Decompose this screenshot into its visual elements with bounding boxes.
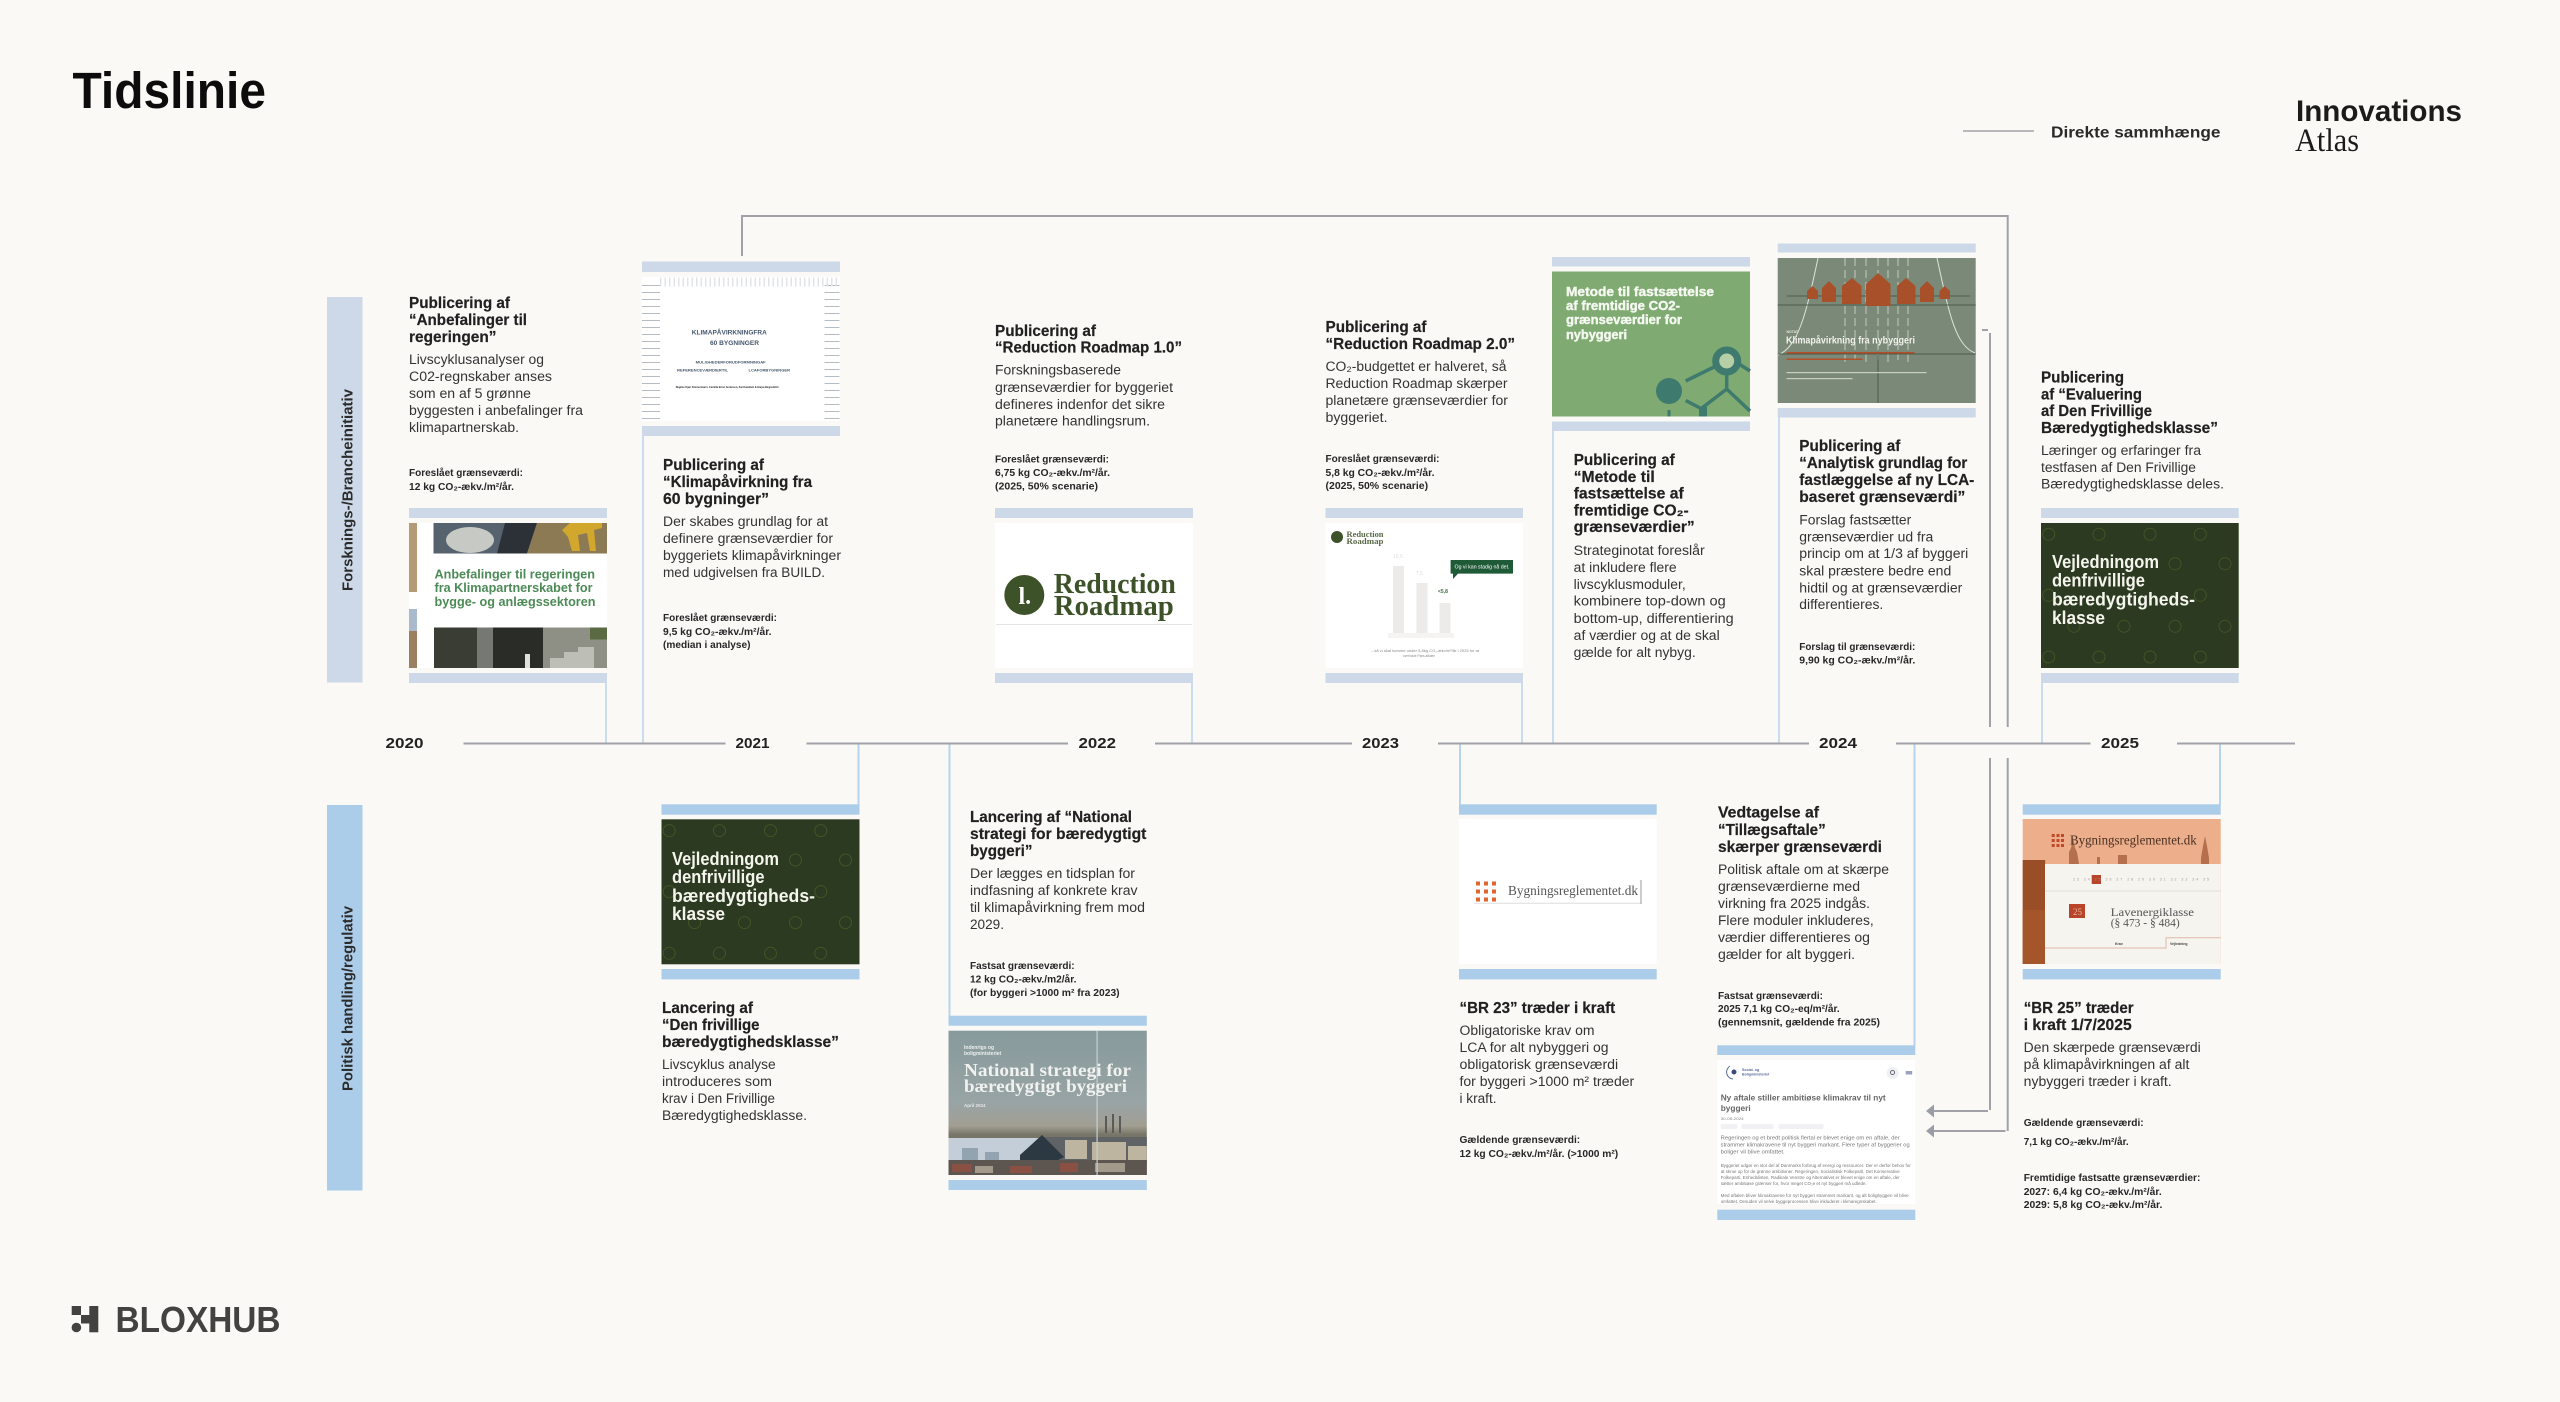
heading — [2024, 1000, 2134, 1034]
heading: “Reduction Roadmap 1.0” — [995, 340, 1182, 356]
bottom bar — [1717, 1210, 1915, 1220]
bottom bar — [1326, 673, 1523, 683]
body text: for byggeri >1000 m² træder — [1460, 1074, 1635, 1089]
side label: Politisk handling/regulativ — [327, 805, 362, 1190]
bottom bar — [1552, 422, 1750, 431]
cover image: Metode — [1552, 272, 1750, 416]
body text: til klimapåvirkning frem mod — [970, 900, 1145, 915]
cover image: Reduction Roadmap chart — [1326, 523, 1523, 668]
body text: Der skabes grundlag for at — [663, 514, 828, 529]
logo: Innovations Atlas — [2295, 95, 2462, 159]
cover image: National strategi: National strategi for — [964, 1060, 1131, 1080]
body text: livscyklusmoduler, — [1574, 577, 1686, 592]
body text: på klimapåvirkningen af alt — [2024, 1057, 2190, 1072]
body text: grænseværdier for byggeriet — [995, 380, 1173, 395]
timeline axis: 2024 — [1819, 735, 1858, 752]
cover image: Metode: Metode til fastsættelse — [1566, 285, 1714, 299]
current limit value: Gældende grænseværdi: — [1460, 1134, 1580, 1146]
cover image: Vejledning om den frivillige bæredygtighedsklasse — [2041, 523, 2239, 668]
body text — [663, 514, 842, 580]
cover image: ministry web page: 30-05-2024 — [1721, 1117, 1744, 1121]
heading: Publicering — [2041, 370, 2124, 387]
current limit value — [1460, 1134, 1618, 1160]
body text: Obligatoriske krav om — [1460, 1023, 1594, 1038]
body text: definere grænseværdier for — [663, 531, 834, 546]
body text: i kraft. — [1460, 1091, 1496, 1106]
body text — [409, 352, 584, 435]
heading: skærper grænseværdi — [1718, 839, 1882, 856]
timeline axis: 2022 — [1078, 735, 1116, 752]
cover image: National strategi: Indenrigs og — [964, 1045, 994, 1051]
cover image: Klimapåvirkning fra nybyggeri — [1778, 258, 1976, 403]
body text — [2024, 1040, 2201, 1089]
proposed limit value: Foreslået grænseværdi: — [409, 467, 523, 479]
arrow: direct link from Klimapåvirkning 60 bygninger to Tillægsaftale — [742, 216, 2008, 1138]
body text: defineres indenfor det sikre — [995, 397, 1165, 412]
cover image: Metode: nybyggeri — [1566, 328, 1627, 342]
body text: værdier differentieres og — [1718, 930, 1870, 945]
body text: med udgivelsen fra BUILD. — [663, 565, 825, 580]
cover image: Bygningsreglementet site: Lavenergiklasse — [2111, 905, 2194, 919]
proposed limit value — [1799, 641, 1915, 666]
cover image: Klimapåvirkning: REFERENCEVÆRDIERTIL — [677, 368, 729, 372]
body text: differentieres. — [1799, 597, 1883, 612]
cover image: ministry web page: at skrue op for de grønne ambitioner. Regeringen, Socialistisk Folkeparti, Det Konservative — [1721, 1169, 1900, 1174]
proposed limit value — [1326, 453, 1440, 492]
cover image: National strategi: April 2024 — [964, 1103, 986, 1108]
cover image: Bygningsreglementet site — [2023, 819, 2221, 964]
heading: i kraft 1/7/2025 — [2024, 1017, 2132, 1034]
cover image: Reduction Roadmap chart: <5,8 — [1438, 589, 1448, 595]
future limit values: 2027: 6,4 kg CO₂-ækv./m²/år. — [2024, 1186, 2162, 1198]
timeline axis: 2020 — [386, 735, 424, 752]
body text: Bæredygtighedsklasse deles. — [2041, 477, 2224, 492]
heading: Publicering af — [663, 457, 765, 474]
cover image: Reduction Roadmap chart: 10,5 — [1393, 554, 1403, 560]
timeline axis: 2025 — [2101, 735, 2139, 752]
body text: C02-regnskaber anses — [409, 369, 552, 384]
cover image: Anbefalinger: fra Klimapartnerskabet for — [434, 580, 592, 595]
fixed limit value: 2025 7,1 kg CO₂-eq/m²/år. — [1718, 1003, 1840, 1015]
cover image: Reduction Roadmap chart: overholde Paris-aftalen — [1403, 654, 1435, 658]
heading: byggeri” — [970, 843, 1032, 860]
cover image: Klimapåvirkning — [642, 277, 840, 421]
proposed limit value: 12 kg CO₂-ækv./m²/år. — [409, 481, 514, 493]
heading: “Tillægsaftale” — [1718, 822, 1826, 839]
cover image: Vejledning om den frivillige bæredygtighedsklasse — [662, 819, 860, 964]
body text: byggeriet. — [1326, 410, 1388, 425]
logo: BLOXHUB: BLOXHUB — [116, 1299, 280, 1340]
panel: 2020 Anbefalinger til regeringen — [409, 295, 607, 683]
cover image: Vejledning om den frivillige bæredygtighedsklasse: Vejledningom — [672, 849, 779, 869]
fixed limit value — [1718, 990, 1880, 1029]
cover image: Vejledning om den frivillige bæredygtighedsklasse: denfrivillige — [672, 867, 764, 887]
body text — [1326, 359, 1509, 425]
panel: 2022 National strategi for bæredygtigt byggeri — [948, 809, 1147, 1190]
heading: “BR 25” træder — [2024, 1000, 2134, 1017]
proposed limit value: (2025, 50% scenarie) — [1326, 480, 1428, 492]
cover image: Klimapåvirkning: 60 BYGNINGER — [710, 340, 759, 347]
heading: “Klimapåvirkning fra — [663, 473, 812, 491]
current limit value: Gældende grænseværdi: — [2024, 1117, 2144, 1129]
body text: Forskningsbaserede — [995, 362, 1121, 378]
cover image: Bygningsreglementet site: (§ 473 - § 484) — [2111, 916, 2180, 930]
cover image: Bygningsreglementet site: 25 — [2073, 907, 2082, 917]
cover image: ministry web page: Regeringen og et bredt politisk flertal er blevet enige om en aftale, der — [1721, 1136, 1900, 1142]
cover image: Reduction Roadmap chart: ...så vi skal komme under 5,8kg CO₂-ækv/m²/år i 2025 for at — [1371, 649, 1479, 653]
body text: kombinere top-down og — [1574, 594, 1726, 608]
body text: at inkludere flere — [1574, 560, 1677, 575]
proposed limit value — [663, 612, 777, 651]
cover image: ministry web page: boliger vil blive omfattet. — [1721, 1150, 1785, 1156]
body text: byggesten i anbefalinger fra — [409, 403, 584, 418]
timeline axis: 2021 — [736, 735, 770, 752]
heading: af “Evaluering — [2041, 387, 2142, 404]
body text — [662, 1057, 807, 1123]
proposed limit value: 9,90 kg CO₂-ækv./m²/år. — [1799, 654, 1915, 666]
body text — [1718, 862, 1889, 962]
future limit values: Fremtidige fastsatte grænseværdier: — [2024, 1172, 2200, 1184]
title: Tidslinie — [72, 62, 266, 119]
proposed limit value: 6,75 kg CO₂-ækv./m²/år. — [995, 467, 1110, 479]
heading — [663, 457, 812, 508]
cover image: National strategi — [948, 1031, 1147, 1175]
heading: Lancering af “National — [970, 809, 1132, 826]
body text: 2029. — [970, 917, 1004, 932]
cover image: Vejledning om den frivillige bæredygtighedsklasse: bæredygtigheds- — [672, 886, 815, 906]
heading — [995, 323, 1182, 356]
body text: Reduction Roadmap skærper — [1326, 376, 1508, 391]
side label: Forsknings-/Brancheinitiativ: Forsknings-/Brancheinitiativ — [340, 388, 356, 591]
body text: som en af 5 grønne — [409, 386, 531, 401]
cover image: Reduction Roadmap chart: Og vi kan stadig nå det. — [1454, 564, 1510, 570]
heading: af Den Frivillige — [2041, 403, 2152, 420]
proposed limit value: (2025, 50% scenarie) — [995, 480, 1098, 492]
heading: “Anbefalinger til — [409, 312, 527, 329]
heading: “BR 23” træder i kraft — [1460, 1000, 1616, 1017]
panel: 2023 Metode til fastsættelse — [1552, 257, 1750, 660]
cover image: Klimapåvirkning fra nybyggeri: NOTAT — [1786, 330, 1799, 334]
bottom bar — [409, 673, 607, 683]
body text: Den skærpede grænseværdi — [2024, 1040, 2201, 1055]
body text: Flere moduler inkluderes, — [1718, 913, 1874, 928]
panel: 2024 Tillægsaftale — [1717, 805, 1915, 1220]
panel: 2025 BR 25 træder i kraft — [2023, 804, 2221, 1211]
cover image: ministry web page: Med aftalen bliver klimakravene for nyt byggeri strammet markant, og alt boligbyggeri vil blive — [1721, 1193, 1909, 1198]
body text: byggeriets klimapåvirkninger — [663, 548, 842, 563]
body text: virkning fra 2025 indgås. — [1718, 896, 1870, 911]
current limit value: 7,1 kg CO₂-ækv./m²/år. — [2024, 1136, 2129, 1148]
bottom bar — [642, 426, 840, 436]
top bar — [948, 1016, 1147, 1026]
heading: Publicering af — [1574, 452, 1675, 469]
cover image: ministry web page: omfattet. Desuden vil selve byggeprocessen blive inkluderet i klimaregnskabet. — [1721, 1199, 1877, 1204]
body text: Politisk aftale om at skærpe — [1718, 862, 1889, 877]
body text: bottom-up, differentiering — [1574, 611, 1734, 626]
heading: “Reduction Roadmap 2.0” — [1326, 336, 1515, 353]
heading: regeringen” — [409, 329, 496, 346]
body text: gælde for alt nybyg. — [1574, 645, 1696, 660]
proposed limit value: 5,8 kg CO₂-ækv./m²/år. — [1326, 467, 1435, 479]
body text: skal præstere bedre end — [1799, 564, 1951, 578]
cover image: Vejledning om den frivillige bæredygtighedsklasse: denfrivillige — [2052, 571, 2145, 591]
cover image: Metode: af fremtidige CO2- — [1566, 299, 1680, 313]
body text: hidtil og at grænseværdier — [1799, 580, 1963, 596]
body text: princip om at 1/3 af byggeri — [1799, 546, 1968, 561]
cover image: Reduction Roadmap logo: l. — [1018, 584, 1031, 610]
proposed limit value — [995, 454, 1110, 492]
proposed limit value: Forslag til grænseværdi: — [1799, 641, 1915, 653]
top bar — [1459, 804, 1657, 815]
fixed limit value: Fastsat grænseværdi: — [970, 960, 1075, 972]
top bar — [1778, 244, 1976, 252]
cover image: ministry web page: Social- og — [1742, 1068, 1759, 1072]
heading: Vedtagelse af — [1718, 805, 1820, 822]
heading: Publicering af — [995, 323, 1097, 340]
body text: LCA for alt nybyggeri og — [1460, 1040, 1608, 1055]
body text: grænseværdier ud fra — [1799, 530, 1934, 544]
cover image: Anbefalinger: bygge- og anlægssektoren — [434, 594, 596, 609]
bottom bar — [662, 969, 860, 979]
cover image: ministry web page: Ny aftale stiller ambitiøse klimakrav til nyt — [1721, 1093, 1886, 1103]
body text: Livscyklus analyse — [662, 1057, 776, 1072]
cover image: Klimapåvirkning: KLIMAPÅVIRKNINGFRA — [692, 328, 767, 336]
logo: Innovations Atlas: Innovations — [2296, 95, 2462, 128]
bottom bar — [948, 1180, 1147, 1190]
body text: nybyggeri træder i kraft. — [2024, 1074, 2172, 1089]
top bar — [409, 508, 607, 518]
body text — [995, 362, 1173, 428]
current limit value — [2024, 1117, 2144, 1148]
body text: Læringer og erfaringer fra — [2041, 443, 2202, 458]
body text: krav i Den Frivillige — [662, 1091, 775, 1106]
cover image: Bygningsreglementet logo: Bygningsreglementet.dk — [1508, 884, 1638, 899]
top bar — [642, 262, 840, 272]
top bar — [662, 804, 860, 815]
legend: direkte sammhænge: Direkte sammhænge — [2051, 124, 2221, 142]
heading: fastlæggelse af ny LCA- — [1799, 472, 1974, 489]
heading — [1574, 452, 1695, 536]
cover image: Bygningsreglementet site: 23 24 25 26 27 28 29 30 31 32 33 34 35 — [2073, 878, 2209, 882]
side label: Forsknings-/Brancheinitiativ — [327, 297, 362, 682]
heading: 60 bygninger” — [663, 491, 769, 508]
timeline axis: 2023 — [1362, 735, 1399, 752]
heading — [1718, 805, 1882, 856]
body text — [1460, 1023, 1635, 1106]
cover image: ministry web page: Byggeriet udgør en stor del af Danmarks forbrug af energi og ressourcer. Der er derfor behov for — [1721, 1163, 1911, 1168]
cover image: Bygningsreglementet logo — [1459, 819, 1657, 964]
future limit values: 2029: 5,8 kg CO₂-ækv./m²/år. — [2024, 1199, 2162, 1211]
cover image: Klimapåvirkning: LCAFORBYGNINGER — [748, 368, 790, 372]
cover image: Bygningsreglementet site: Krav — [2115, 942, 2123, 946]
heading: Lancering af — [662, 1000, 754, 1017]
cover image: Vejledning om den frivillige bæredygtighedsklasse: bæredygtigheds- — [2052, 590, 2195, 610]
cover image: Reduction Roadmap logo: Reduction — [1054, 568, 1176, 600]
cover image: ministry web page: Folkeparti, Enhedslisten, Radikale Venstre og Alternativet er blevet enige om en aftale, der — [1721, 1175, 1900, 1180]
fixed limit value — [970, 960, 1120, 999]
panel: 2022 Reduction Roadmap 1.0 — [995, 323, 1193, 683]
top bar — [2023, 804, 2221, 815]
bottom bar — [1778, 408, 1976, 418]
body text: testfasen af Den Frivillige — [2041, 460, 2196, 475]
body text: grænseværdierne med — [1718, 879, 1860, 894]
fixed limit value: (gennemsnit, gældende fra 2025) — [1718, 1017, 1880, 1029]
cover image: Reduction Roadmap chart: Roadmap — [1346, 536, 1384, 546]
cover image: Reduction Roadmap logo: Roadmap — [1054, 590, 1174, 622]
proposed limit value: 9,5 kg CO₂-ækv./m²/år. — [663, 626, 772, 638]
body text: CO₂-budgettet er halveret, så — [1326, 359, 1507, 374]
heading: grænseværdier” — [1574, 519, 1695, 536]
body text: Der lægges en tidsplan for — [970, 866, 1136, 881]
proposed limit value: Foreslået grænseværdi: — [995, 454, 1109, 466]
cover image: Anbefalinger — [409, 523, 607, 668]
top bar — [1552, 257, 1750, 266]
body text: Forslag fastsætter — [1799, 512, 1912, 528]
heading: Publicering af — [1799, 438, 1901, 455]
top bar — [2041, 508, 2239, 518]
body text: planetære grænseværdier for — [1326, 393, 1509, 408]
body text: Bæredygtighedsklasse. — [662, 1108, 807, 1123]
heading: “Den frivillige — [662, 1017, 760, 1034]
cover image: ministry web page: strammer klimakravene til nyt byggeri markant. Flere typer af byggerier og — [1721, 1142, 1910, 1148]
bottom bar — [2041, 673, 2239, 683]
panel: 2021 Klimapåvirkning fra 60 bygninger — [642, 262, 842, 651]
fixed limit value: (for byggeri >1000 m² fra 2023) — [970, 987, 1120, 999]
proposed limit value: Foreslået grænseværdi: — [663, 612, 777, 624]
bottom bar — [1459, 969, 1657, 979]
cover image: Vejledning om den frivillige bæredygtighedsklasse: klasse — [672, 904, 725, 924]
heading — [970, 809, 1147, 860]
body text: Strateginotat foreslår — [1574, 543, 1705, 558]
cover image: ministry web page: sætter ambitiøse grænser for, hvor meget CO₂e et nyt byggeri må udlede. — [1721, 1180, 1867, 1186]
heading — [2041, 370, 2218, 437]
cover image: Klimapåvirkning fra nybyggeri: Klimapåvirkning fra nybyggeri — [1786, 334, 1915, 346]
cover image: National strategi: bæredygtigt byggeri — [964, 1076, 1127, 1096]
heading — [1326, 319, 1515, 353]
cover image: Anbefalinger: Anbefalinger til regeringen — [434, 566, 595, 582]
cover image: National strategi: boligministeriet — [964, 1051, 1002, 1057]
fixed limit value: Fastsat grænseværdi: — [1718, 990, 1823, 1002]
body text: af værdier og at de skal — [1574, 628, 1720, 643]
body text — [970, 866, 1145, 932]
heading — [409, 295, 527, 346]
body text: obligatorisk grænseværdi — [1460, 1057, 1618, 1072]
heading: strategi for bæredygtigt — [970, 826, 1147, 843]
body text — [1799, 512, 1968, 612]
heading: Publicering af — [409, 295, 511, 312]
body text — [2041, 443, 2224, 492]
cover image: Vejledning om den frivillige bæredygtighedsklasse: Vejledningom — [2052, 552, 2159, 572]
upper connector stems — [606, 417, 2042, 743]
heading: fastsættelse af — [1574, 486, 1684, 502]
cover image: Klimapåvirkning: MULIGHEDERFORUDFORMNINGAF — [696, 360, 766, 364]
heading: bæredygtighedsklasse” — [662, 1034, 839, 1051]
bottom bar — [995, 673, 1193, 683]
future limit values — [2024, 1172, 2200, 1211]
proposed limit value — [409, 467, 523, 493]
top bar — [1717, 1045, 1915, 1055]
heading — [1799, 438, 1974, 506]
current limit value: 12 kg CO₂-ækv./m²/år. (>1000 m²) — [1460, 1148, 1618, 1160]
heading: fremtidige CO₂- — [1574, 502, 1689, 520]
panel: 2023 BR 23 træder i kraft — [1459, 804, 1657, 1160]
panel: 2024 Analytisk grundlag — [1778, 244, 1976, 666]
cover image: Reduction Roadmap chart: Reduction — [1346, 529, 1384, 539]
fixed limit value: 12 kg CO₂-ækv./m2/år. — [970, 974, 1076, 986]
cover image: ministry web page: byggeri — [1721, 1103, 1751, 1113]
cover image: Reduction Roadmap logo — [995, 523, 1193, 668]
body text: gælder for alt byggeri. — [1718, 947, 1855, 962]
cover image: ministry web page: Boligministeriet — [1742, 1072, 1770, 1076]
top bar — [1326, 508, 1523, 518]
logo: Innovations Atlas: Atlas — [2295, 123, 2359, 159]
proposed limit value: (median i analyse) — [663, 639, 750, 651]
cover image: Bygningsreglementet site: Bygningsreglementet.dk — [2070, 833, 2197, 848]
cover image: Metode: grænseværdier for — [1566, 313, 1682, 327]
heading: baseret grænseværdi” — [1799, 489, 1965, 506]
heading: Publicering af — [1326, 319, 1427, 336]
bottom bar — [2023, 969, 2221, 979]
body text: introduceres som — [662, 1074, 772, 1089]
body text — [1574, 543, 1734, 660]
body text: Livscyklusanalyser og — [409, 352, 544, 367]
proposed limit value: Foreslået grænseværdi: — [1326, 453, 1440, 465]
cover image: Vejledning om den frivillige bæredygtighedsklasse: klasse — [2052, 608, 2105, 628]
body text: planetære handlingsrum. — [995, 414, 1150, 428]
timeline axis — [386, 735, 2295, 752]
panel: 2025 Evaluering af Den Frivillige Bæredygtighedsklasse — [2041, 370, 2239, 683]
arrow: direct link from Analytisk grundlag to Tillægsaftale — [1926, 330, 1990, 1118]
cover image: Klimapåvirkning: Regitze Kjær Zimmermann, Camilla Ernst Andersen, Kai Kanafani & Harpa Birgisdóttir — [676, 385, 780, 389]
panel: 2023 Reduction Roadmap 2.0 — [1326, 319, 1523, 683]
heading: “Metode til — [1574, 469, 1655, 486]
top bar — [995, 508, 1193, 518]
body text: klimapartnerskab. — [409, 420, 519, 435]
heading — [662, 1000, 839, 1051]
side label: Politisk handling/regulativ: Politisk handling/regulativ — [340, 905, 356, 1091]
body text: indfasning af konkrete krav — [970, 883, 1138, 898]
cover image: ministry web page — [1717, 1060, 1915, 1204]
heading: “Analytisk grundlag for — [1799, 455, 1967, 472]
lower connector stems — [858, 743, 2220, 1046]
panel: 2021 Den frivillige bæredygtighedsklasse — [662, 804, 860, 1123]
cover image: Bygningsreglementet site: Vejledning — [2170, 942, 2188, 946]
cover image: Reduction Roadmap chart: 7,5 — [1416, 571, 1423, 577]
heading: Bæredygtighedsklasse” — [2041, 420, 2218, 437]
